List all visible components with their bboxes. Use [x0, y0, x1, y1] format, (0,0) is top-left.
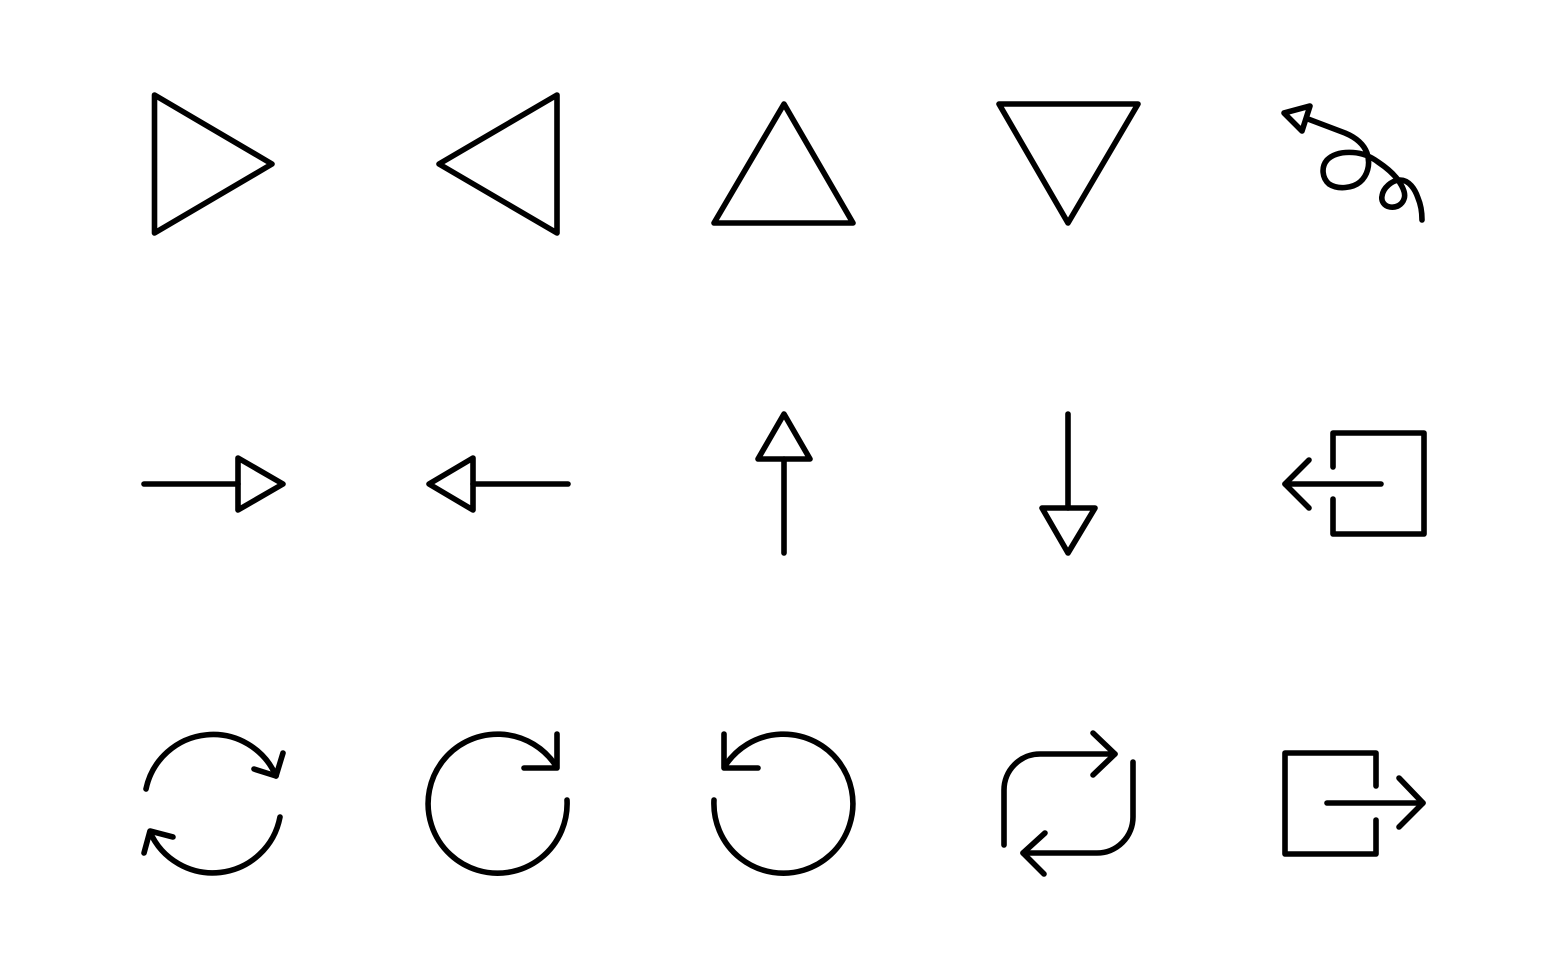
icon: triangle pointing up	[714, 104, 853, 223]
icon: squiggly looped arrow	[1284, 106, 1422, 220]
icon: two-arrow refresh cycle	[144, 735, 283, 873]
icon: exit right box arrow	[1285, 753, 1423, 854]
icon: arrow up with triangle head	[758, 414, 810, 553]
icon: triangle pointing down	[999, 104, 1138, 223]
icon: exit left box arrow	[1285, 433, 1424, 534]
icon: arrow right with triangle head	[144, 458, 283, 510]
icon: clockwise redo circle	[428, 734, 567, 873]
icon: arrow down with triangle head	[1042, 414, 1095, 553]
icon: triangle pointing right	[154, 95, 272, 233]
icon: arrow left with triangle head	[429, 458, 568, 510]
icon: counterclockwise undo circle	[714, 734, 853, 873]
icon: triangle pointing left	[439, 95, 557, 233]
icon: repeat loop arrows	[1004, 733, 1133, 874]
